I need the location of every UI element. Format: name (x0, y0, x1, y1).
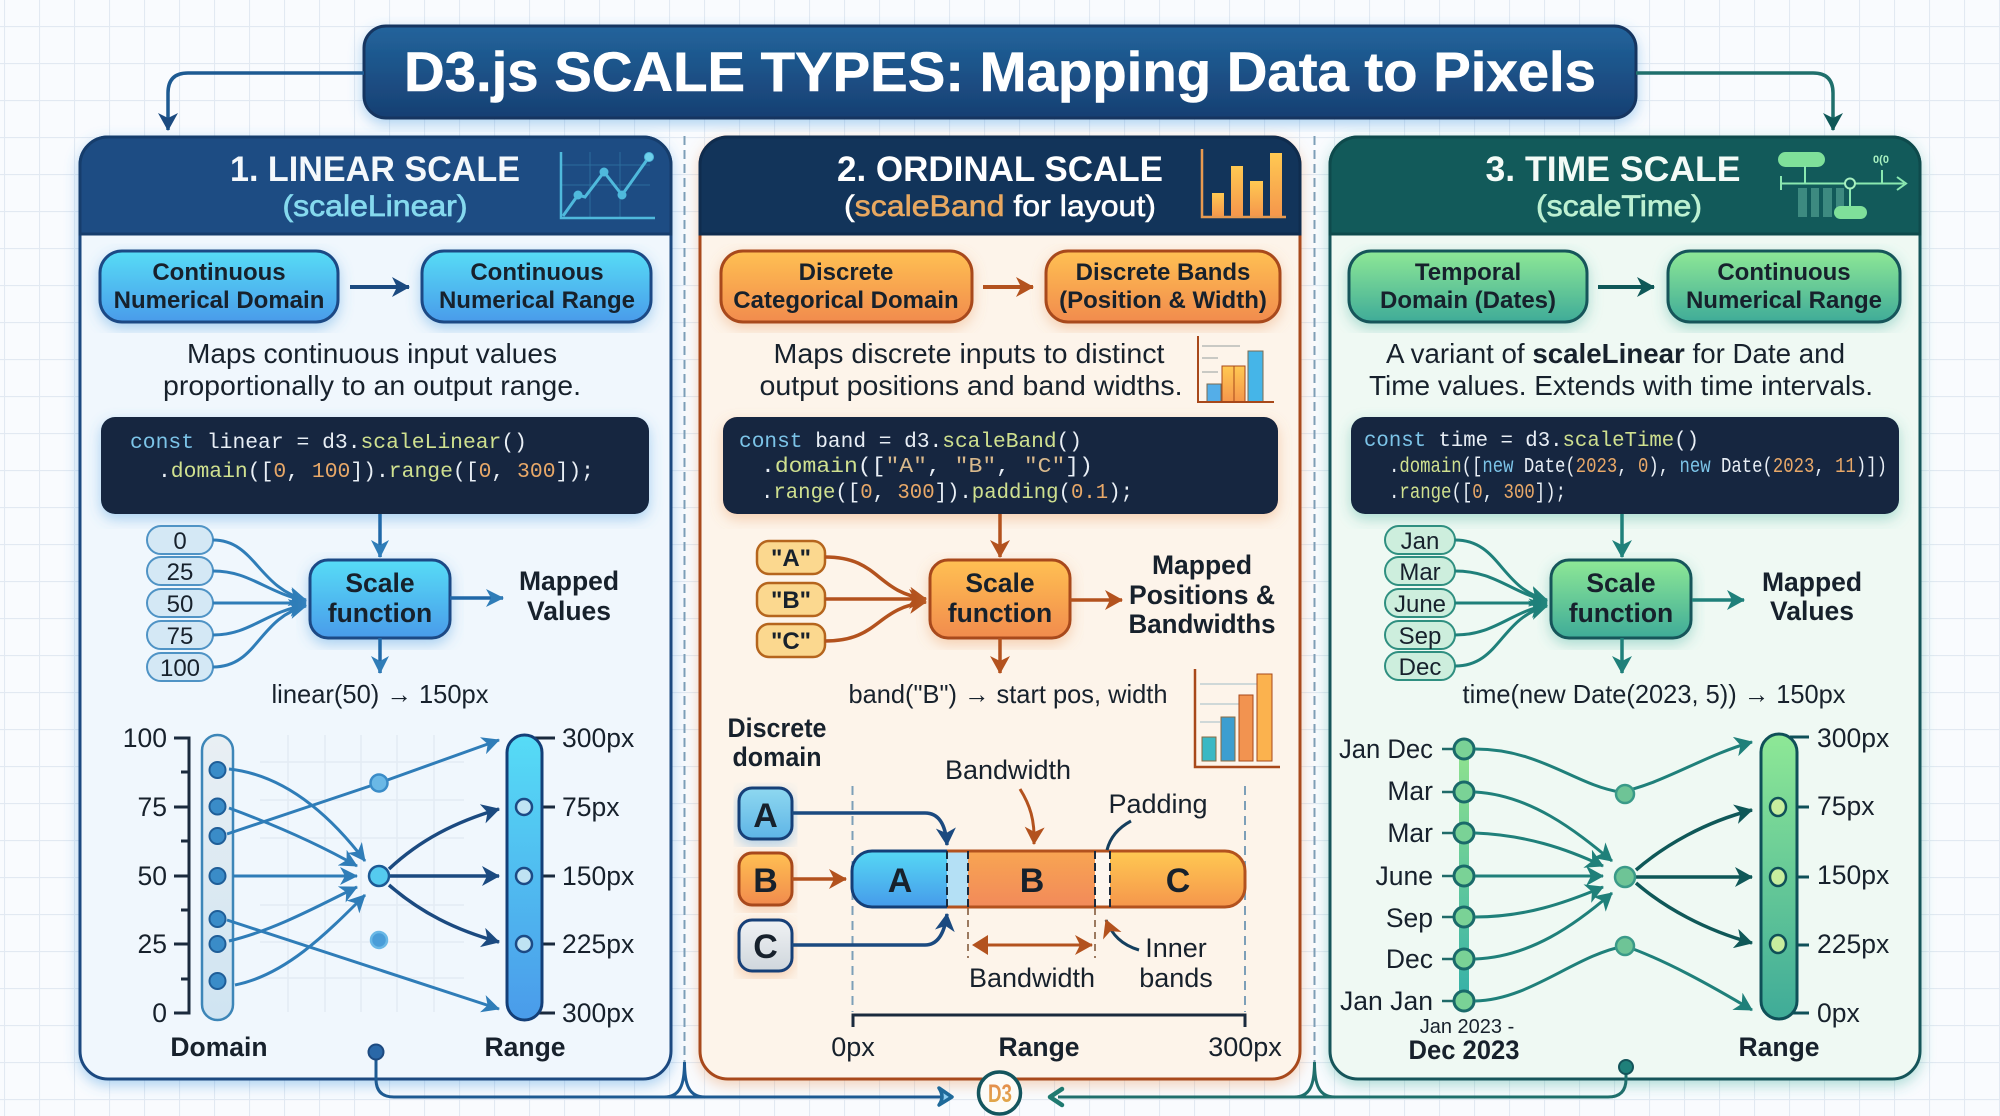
input curves (825, 557, 926, 641)
title banner: D3.js SCALE TYPES: Mapping Data to Pixels (404, 40, 1596, 103)
output arrows (1636, 810, 1752, 943)
arrow to mapped values (1692, 598, 1744, 602)
arrow C to band (792, 914, 947, 945)
scale function box: Scale (1586, 568, 1656, 598)
domain box (100, 251, 338, 322)
icon: line chart (561, 152, 655, 218)
code block: .domain (["A", "B", "C"]) (761, 456, 1093, 479)
inner bands callout (1106, 920, 1213, 993)
scale midpoints (369, 774, 389, 948)
range box: Numerical Range (1686, 287, 1882, 314)
arrow A to band (792, 813, 947, 845)
scale function box (1551, 560, 1691, 638)
domain box (1349, 251, 1587, 322)
input pills: "C" (771, 628, 811, 655)
arrow B to band (792, 877, 846, 881)
arrow to example (998, 638, 1002, 673)
domain axis: 50 (138, 861, 167, 891)
range axis: 0px (831, 1032, 875, 1062)
input pills: 75 (167, 623, 193, 650)
date axis: June (1376, 861, 1433, 891)
panel: linear scale (80, 137, 671, 1079)
example formula: linear(50) → 150px (272, 679, 488, 709)
range label: Range (1738, 1032, 1820, 1062)
icon: bar chart (1202, 149, 1286, 217)
category chip C (739, 920, 792, 971)
mapped positions label: Bandwidths (1128, 609, 1276, 639)
arrow to example (378, 638, 382, 673)
band diagram (739, 755, 1282, 1062)
input curves (1455, 540, 1547, 666)
domain label: Domain (170, 1032, 268, 1062)
code block: .range([0, 300]).padding(0.1); (761, 482, 1133, 505)
input pills: Dec (1399, 654, 1441, 681)
arrow domain to range (983, 285, 1033, 289)
range axis (831, 1015, 1282, 1062)
band bar: A (888, 862, 912, 900)
date axis: Jan Jan (1340, 986, 1433, 1016)
arrow: title to time panel (1636, 73, 1833, 130)
scale function box: function (948, 598, 1052, 628)
input pills: Sep (1399, 623, 1441, 650)
range capsule: 300px (562, 723, 634, 753)
arrow: title to linear panel (168, 73, 364, 130)
input pills: 100 (160, 655, 200, 682)
connector: time panel to logo (1050, 1060, 1633, 1105)
example formula: time(new Date(2023, 5)) → 150px (1462, 679, 1846, 709)
date axis: Mar (1387, 776, 1433, 806)
category chip A: A (753, 797, 778, 835)
range capsule: 150px (562, 861, 634, 891)
code block (723, 417, 1278, 514)
range capsule (507, 723, 634, 1028)
icon: timeline: 0(0 (1873, 154, 1889, 166)
input curves (213, 540, 306, 667)
category chip A (739, 788, 792, 839)
input pills (147, 526, 213, 682)
example formula: band("B") → start pos, width (848, 679, 1168, 709)
connector: linear panel to logo (368, 1044, 952, 1105)
ordinal header: (scaleBand for layout) (844, 190, 1156, 223)
input pills: 25 (167, 559, 193, 586)
description: A variant of scaleLinear for Date and (1386, 338, 1845, 369)
arrow code to scale function (1620, 514, 1624, 557)
domain axis: 75 (138, 792, 167, 822)
category chip C: C (753, 928, 778, 966)
domain axis (123, 723, 189, 1028)
arrow code to scale function (998, 514, 1002, 557)
range axis: Range (998, 1032, 1080, 1062)
category chip B (739, 853, 792, 905)
discrete domain label: Discrete (728, 713, 826, 743)
range box: (Position & Width) (1059, 287, 1267, 314)
code block: .domain([new Date(2023, 0), new Date(2023, 11)]) (1389, 456, 1887, 479)
ordinal header: 2. ORDINAL SCALE (837, 150, 1163, 189)
scale function box (310, 560, 450, 638)
range capsule: 225px (562, 929, 634, 959)
padding callout (1107, 789, 1208, 850)
padding callout: Padding (1108, 789, 1208, 819)
bandwidth dimension: Bandwidth (969, 963, 1095, 993)
scale function box: Scale (965, 568, 1035, 598)
mapped values label: Values (1770, 596, 1854, 626)
band bar: C (1166, 862, 1190, 900)
domain box: Discrete (799, 259, 893, 286)
panel: time scale (1330, 137, 1920, 1079)
range axis: 300px (1208, 1032, 1282, 1062)
date range label: Dec 2023 (1408, 1035, 1520, 1065)
domain axis: 0 (152, 998, 167, 1028)
scale function box: Scale (345, 568, 415, 598)
arrow domain to range (350, 285, 409, 289)
time header (1330, 137, 1920, 234)
description: Time values. Extends with time intervals. (1369, 370, 1873, 401)
icon: timeline (1778, 152, 1906, 219)
domain box: Continuous (152, 259, 286, 286)
title banner (364, 26, 1636, 118)
range box: Numerical Range (439, 287, 635, 314)
domain box (721, 251, 972, 322)
domain box: Temporal (1415, 259, 1521, 286)
inner bands callout: bands (1139, 963, 1213, 993)
arrow to mapped values (450, 596, 503, 600)
mapped values label: Mapped (519, 566, 619, 596)
description: Maps discrete inputs to distinct (774, 338, 1165, 369)
input pills: June (1394, 591, 1446, 618)
range box: Continuous (470, 259, 604, 286)
mapped positions label (1128, 550, 1276, 639)
icon: rising bar chart (1195, 669, 1280, 767)
description (760, 338, 1182, 401)
domain axis: 100 (123, 723, 167, 753)
time header: 3. TIME SCALE (1486, 150, 1740, 189)
range capsule: 225px (1817, 929, 1889, 959)
category chip B: B (753, 862, 778, 900)
mapped values label (1762, 567, 1862, 626)
date range label: Jan 2023 - (1420, 1016, 1514, 1038)
range box (422, 251, 651, 322)
band bar: B (1020, 862, 1044, 900)
description (1369, 338, 1873, 401)
bandwidth callout: Bandwidth (945, 755, 1071, 785)
range capsule: 75px (562, 792, 619, 822)
band bar (852, 851, 1245, 907)
date axis: Jan Dec (1339, 734, 1433, 764)
panel: ordinal scale (700, 137, 1300, 1079)
discrete domain label: domain (732, 742, 822, 772)
code block: const band = d3.scaleBand() (739, 431, 1082, 454)
mapping arrows out (389, 809, 499, 942)
arrow domain to range (1598, 285, 1654, 289)
range label: Range (484, 1032, 566, 1062)
range capsule: 75px (1817, 791, 1874, 821)
arrow to example (1620, 638, 1624, 673)
mapping arrows (1475, 742, 1752, 1010)
input pills: Jan (1401, 528, 1439, 555)
range box (1046, 251, 1280, 322)
description: proportionally to an output range. (163, 370, 581, 401)
domain capsule (202, 735, 233, 1020)
bandwidth dimension (969, 935, 1095, 993)
input pills: Mar (1399, 559, 1441, 586)
mapped positions label: Positions & (1129, 580, 1275, 610)
input pills: 0 (173, 528, 187, 555)
input pills (757, 541, 825, 657)
input pills (1385, 526, 1455, 681)
mapped values label: Mapped (1762, 567, 1862, 597)
range capsule: 300px (562, 998, 634, 1028)
chart: linear mapping (123, 723, 634, 1062)
code block: const time = d3.scaleTime() (1364, 430, 1699, 453)
domain axis: 25 (138, 929, 167, 959)
range box (1668, 251, 1900, 322)
description: output positions and band widths. (760, 370, 1182, 401)
range box: Continuous (1717, 259, 1851, 286)
arrow code to scale function (378, 514, 382, 557)
code block (101, 417, 649, 514)
description: Maps continuous input values (187, 338, 557, 369)
input pills: 50 (167, 591, 193, 618)
mapped values label (519, 566, 619, 626)
domain box: Numerical Domain (114, 287, 324, 314)
description (163, 338, 581, 401)
range capsule: 0px (1817, 998, 1860, 1028)
date range label (1408, 1016, 1520, 1065)
code block (1351, 417, 1899, 514)
range capsule: 150px (1817, 860, 1889, 890)
ordinal header (700, 137, 1300, 234)
scale function box (930, 560, 1070, 638)
date axis: Dec (1386, 944, 1433, 974)
scale function box: function (1569, 598, 1673, 628)
linear header (80, 137, 671, 234)
icon: D3 logo (978, 1072, 1020, 1114)
domain box: Categorical Domain (733, 287, 959, 314)
code block: .range([0, 300]); (1389, 482, 1566, 505)
bandwidth callout (945, 755, 1071, 844)
scale midpoints (1615, 785, 1635, 955)
icon: small band chart (1198, 336, 1274, 402)
mapping arrows in (227, 740, 499, 1009)
input pills: "A" (771, 545, 811, 572)
input pills: "B" (771, 587, 811, 614)
inner bands callout: Inner (1145, 933, 1207, 963)
range capsule (1761, 723, 1889, 1028)
time header: (scaleTime) (1536, 190, 1702, 223)
scale function box: function (328, 598, 432, 628)
icon: D3 logo: D3 (988, 1080, 1012, 1108)
chart: time mapping (1339, 723, 1889, 1065)
range box: Discrete Bands (1076, 259, 1250, 286)
date axis: Sep (1386, 903, 1433, 933)
code block: const linear = d3.scaleLinear() (130, 432, 527, 455)
date axis (1339, 734, 1474, 1016)
mapped positions label: Mapped (1152, 550, 1252, 580)
linear header: 1. LINEAR SCALE (230, 150, 520, 189)
code block: .domain([0, 100]).range([0, 300]); (158, 461, 594, 484)
linear header: (scaleLinear) (282, 190, 468, 223)
date axis: Mar (1387, 818, 1433, 848)
arrow to mapped label (1070, 598, 1122, 602)
range capsule: 300px (1817, 723, 1889, 753)
mapped values label: Values (527, 596, 611, 626)
domain box: Domain (Dates) (1380, 287, 1556, 314)
discrete domain label (728, 713, 826, 772)
